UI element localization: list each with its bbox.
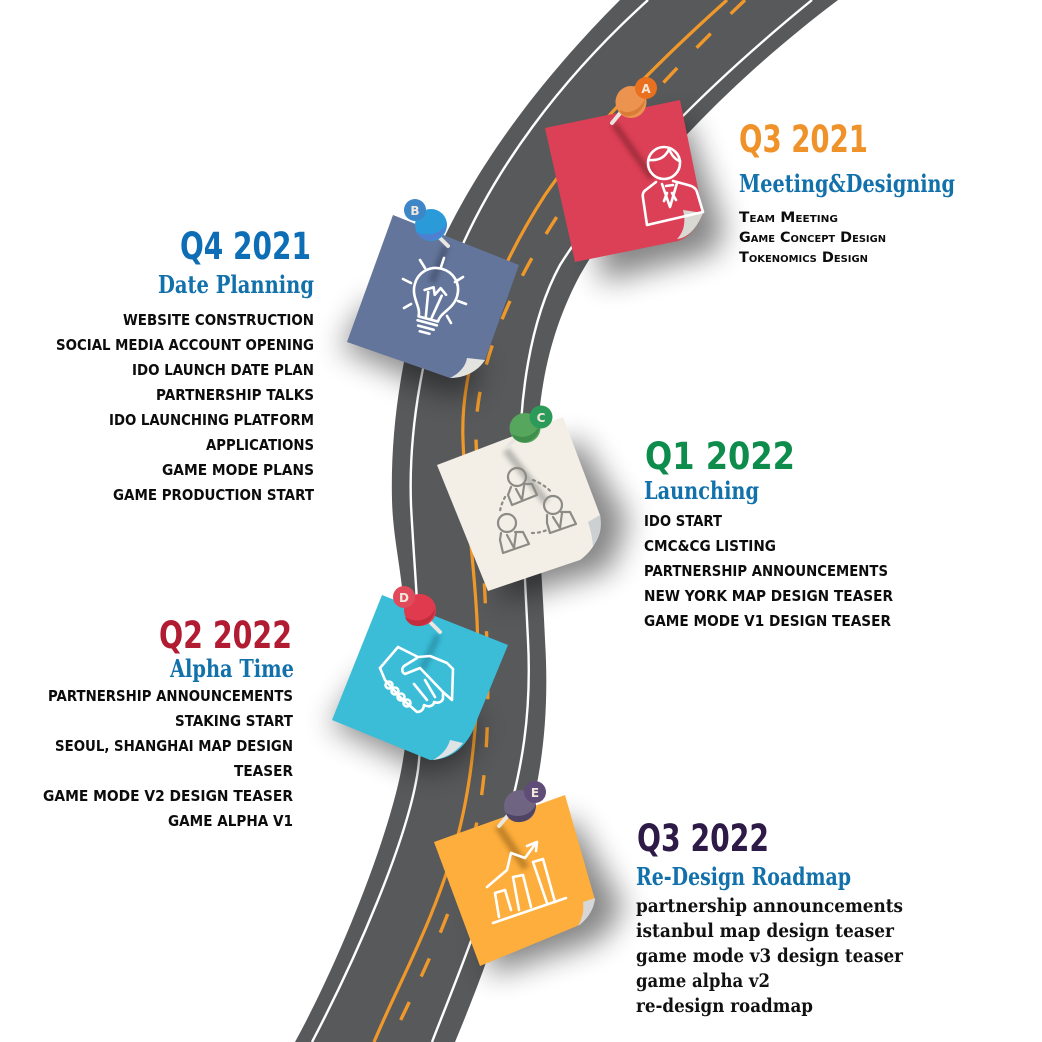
needle shadow [614, 124, 652, 178]
list: NEW YORK MAP DESIGN TEASER [644, 587, 893, 605]
subheading: Re-Design Roadmap [636, 862, 851, 891]
subheading: Meeting&Designing [739, 169, 955, 198]
pin C [508, 406, 552, 446]
note D: alpha time [330, 586, 508, 772]
list: GAME ALPHA V1 [168, 812, 293, 830]
pin E [499, 781, 546, 826]
needle shadow [506, 450, 546, 502]
pin B: B [410, 204, 420, 218]
list [43, 687, 294, 830]
list: re-design roadmap [636, 995, 813, 1017]
note B: date planning [340, 199, 519, 395]
pin D: D [399, 591, 409, 605]
heading: Q3 2022 [637, 817, 769, 860]
list [739, 210, 886, 266]
list: Game Concept Design [739, 230, 886, 246]
needle shadow [498, 826, 526, 868]
subheading: Launching [644, 476, 759, 505]
pin B [404, 199, 448, 246]
icon: person [643, 147, 703, 225]
heading: Q3 2021 [739, 118, 868, 161]
note E: redesign roadmap [434, 781, 624, 975]
list: Tokenomics Design [739, 250, 868, 266]
text block: Q2 2022 [43, 614, 294, 830]
list: istanbul map design teaser [636, 920, 895, 942]
list: game alpha v2 [636, 970, 770, 992]
text block: Q3 2021 [739, 118, 955, 266]
text block: Q4 2021 [56, 225, 315, 504]
list: IDO LAUNCH DATE PLAN [132, 361, 314, 379]
pin C: C [537, 411, 546, 425]
list [636, 895, 904, 1017]
note A: meeting and designing [545, 77, 724, 282]
list: GAME MODE V2 DESIGN TEASER [43, 787, 293, 805]
list: GAME MODE V1 DESIGN TEASER [644, 612, 891, 630]
road [295, 0, 838, 1042]
list: PARTNERSHIP ANNOUNCEMENTS [48, 687, 293, 705]
list: GAME MODE PLANS [162, 461, 314, 479]
list: SOCIAL MEDIA ACCOUNT OPENING [56, 336, 314, 354]
pin D [393, 586, 440, 632]
icon: three people network [498, 468, 576, 553]
text block: Q1 2022 [644, 435, 893, 630]
icon: handshake [380, 647, 453, 712]
list [644, 512, 893, 630]
list: PARTNERSHIP ANNOUNCEMENTS [644, 562, 888, 580]
needle shadow [432, 246, 446, 282]
pin E: E [531, 786, 539, 800]
pin A: A [641, 82, 651, 96]
icon: rising bar chart [487, 842, 566, 923]
subheading: Alpha Time [169, 654, 294, 683]
heading: Q2 2022 [159, 614, 292, 657]
list: APPLICATIONS [206, 436, 314, 454]
list: Team Meeting [739, 210, 838, 226]
list: STAKING START [175, 712, 294, 730]
list: PARTNERSHIP TALKS [156, 386, 314, 404]
needle shadow [422, 635, 438, 670]
list: IDO START [644, 512, 723, 530]
list: TEASER [234, 762, 293, 780]
icon: light bulb [403, 258, 466, 338]
text block: Q3 2022 [636, 817, 904, 1017]
note C: launching [437, 406, 628, 600]
list: SEOUL, SHANGHAI MAP DESIGN [55, 737, 293, 755]
list: partnership announcements [636, 895, 903, 917]
list: GAME PRODUCTION START [113, 486, 315, 504]
list: WEBSITE CONSTRUCTION [123, 311, 314, 329]
heading: Q1 2022 [645, 435, 795, 478]
subheading: Date Planning [158, 270, 314, 299]
list: CMC&CG LISTING [644, 537, 776, 555]
pin A [612, 77, 657, 123]
list [56, 311, 315, 504]
heading: Q4 2021 [180, 225, 311, 268]
list: game mode v3 design teaser [636, 945, 904, 967]
list: IDO LAUNCHING PLATFORM [109, 411, 314, 429]
